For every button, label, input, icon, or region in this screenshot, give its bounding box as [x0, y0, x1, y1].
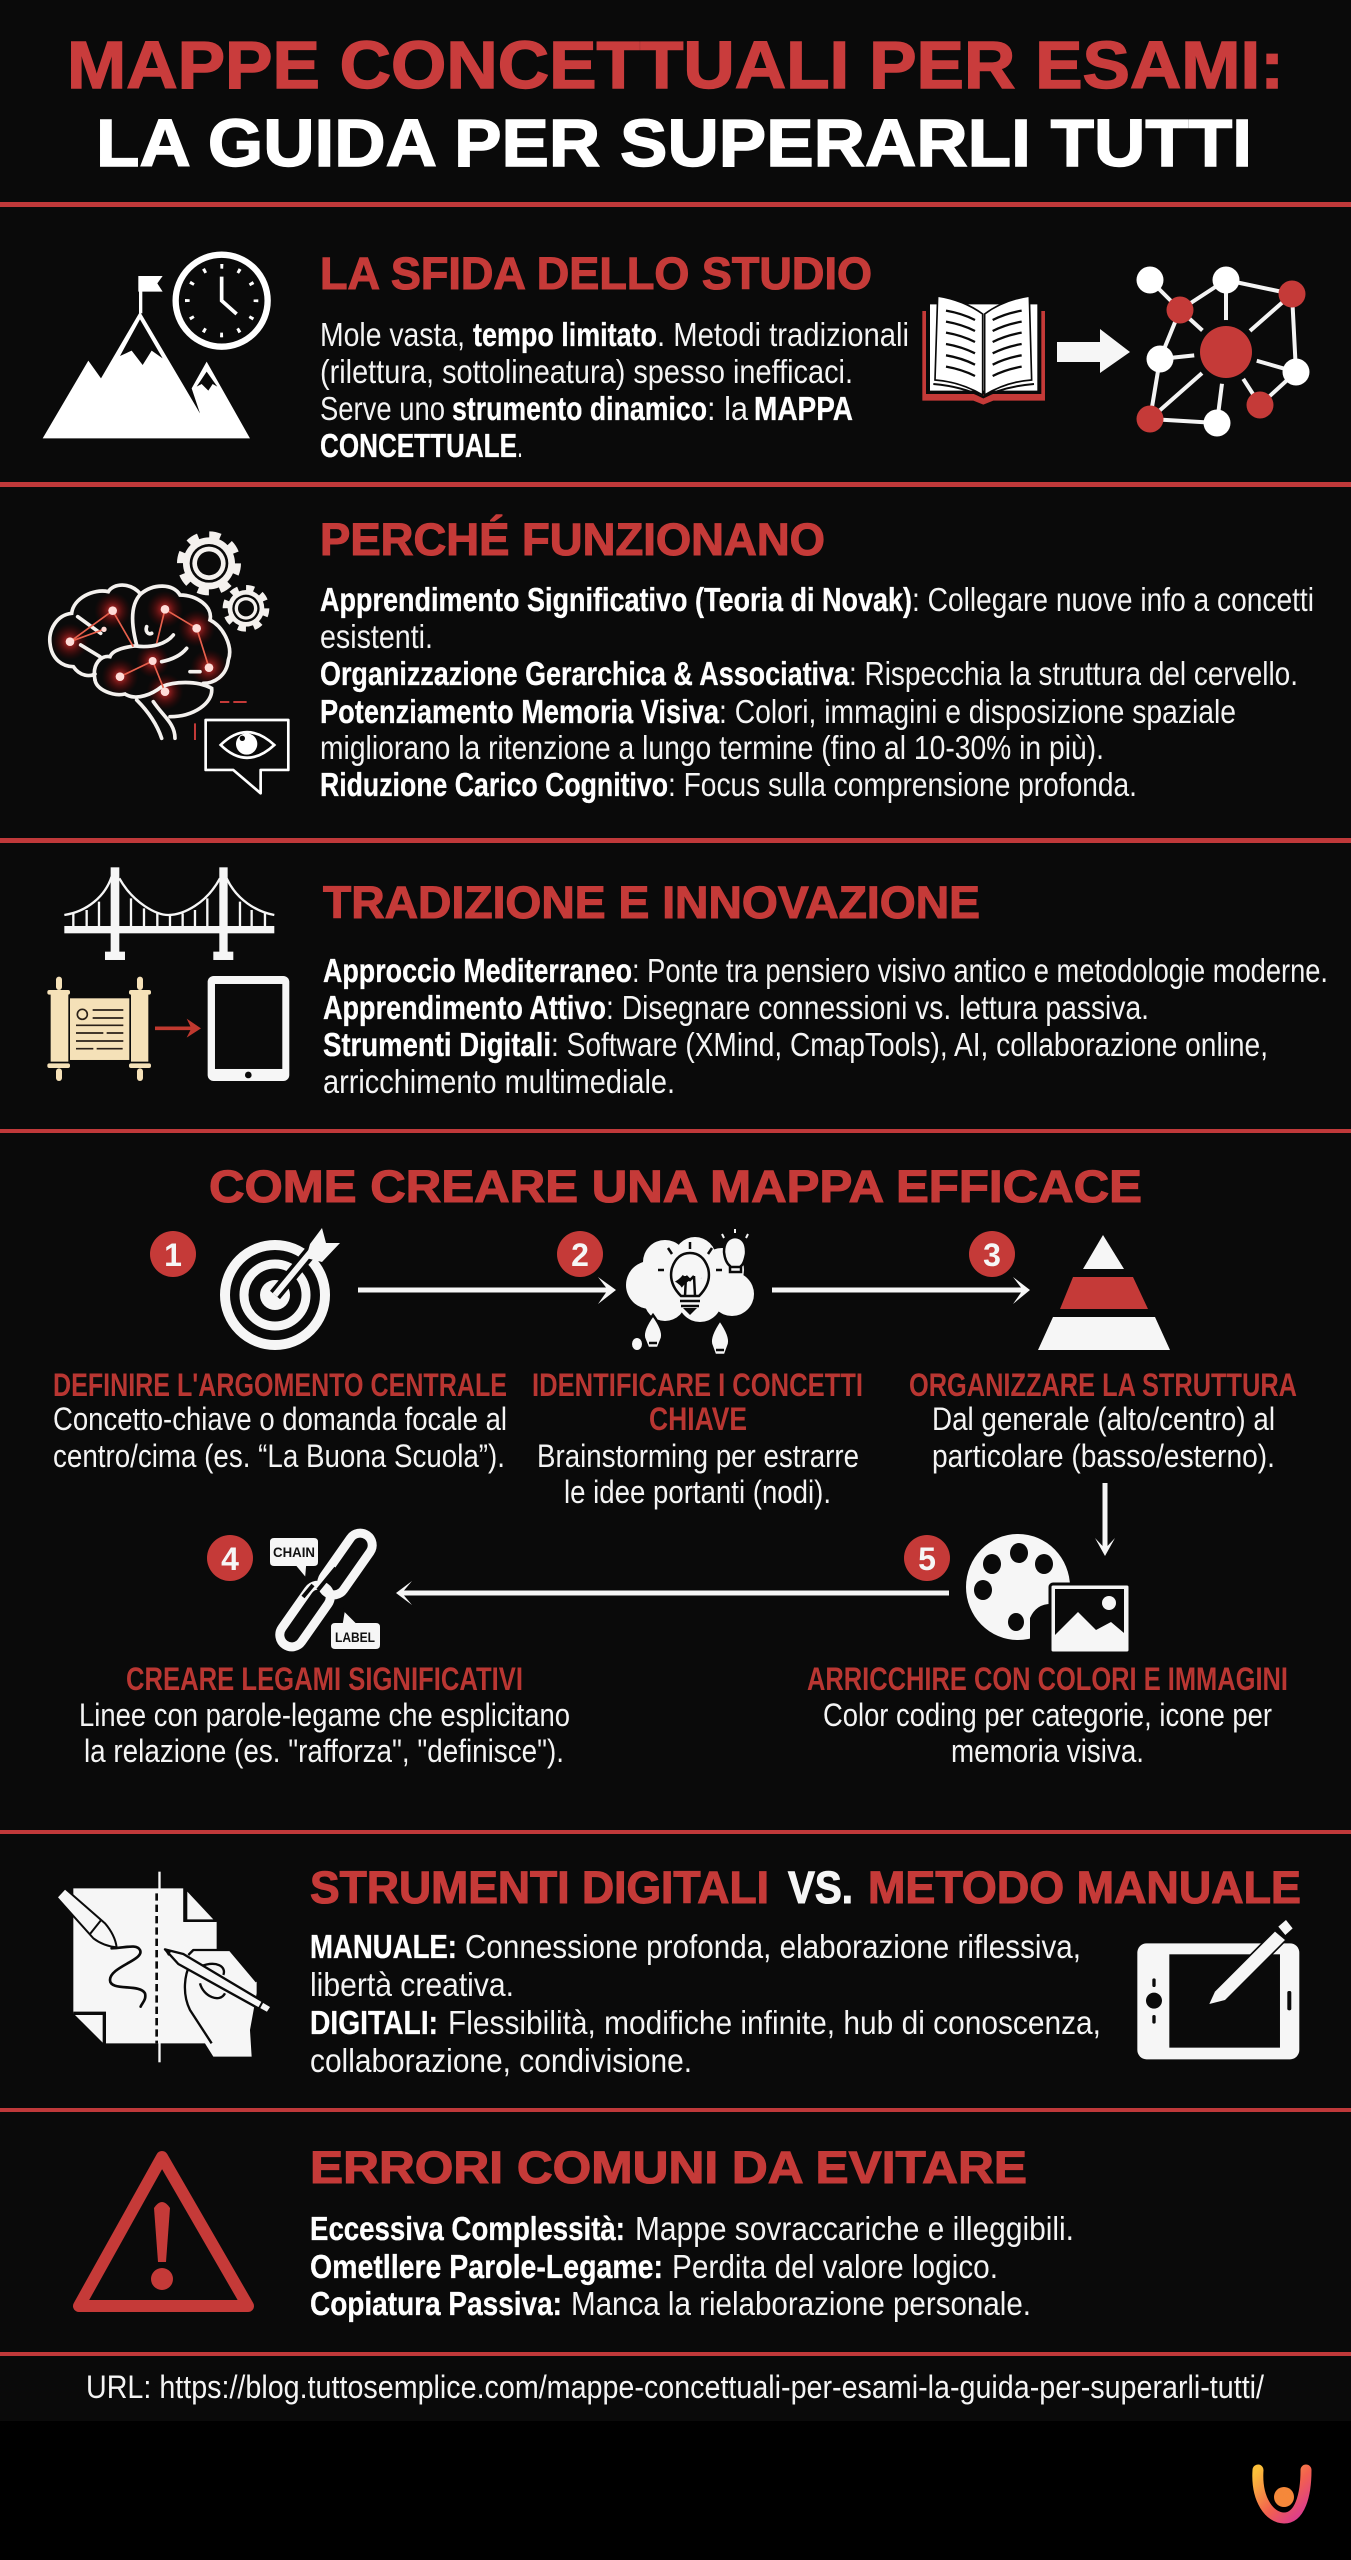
- icon: palette and image: [966, 1534, 1130, 1655]
- label: CHIAVE: [649, 1401, 747, 1437]
- text block: esistenti.: [320, 618, 433, 655]
- panel: errori comuni da evitare: [79, 2142, 1074, 2322]
- text block: Flessibilità, modifiche infinite, hub di conoscenza,: [448, 2004, 1101, 2041]
- text block: Mappe sovraccariche e illeggibili.: [635, 2210, 1074, 2247]
- badge 4: 4: [221, 1541, 239, 1577]
- icon: warning triangle: [79, 2157, 248, 2306]
- text block: [320, 316, 909, 464]
- arrow: [772, 1277, 1030, 1304]
- description: [932, 1401, 1275, 1474]
- description: [53, 1401, 507, 1474]
- badge 5: 5: [918, 1541, 936, 1577]
- text block: Apprendimento Attivo: [323, 989, 606, 1026]
- text block: .: [517, 427, 523, 464]
- badge 3: 3: [983, 1237, 1001, 1273]
- text block: Strumenti Digitali: [323, 1026, 551, 1063]
- panel: tradizione e innovazione: [47, 867, 1328, 1100]
- text block: arricchimento multimediale.: [323, 1063, 675, 1100]
- label: IDENTIFICARE I CONCETTI: [532, 1367, 863, 1403]
- icon: hand drawing on paper: [57, 1872, 272, 2062]
- description: Concetto-chiave o domanda focale al: [53, 1401, 507, 1437]
- text block: Riduzione Carico Cognitivo: [320, 766, 668, 803]
- text block: Organizzazione Gerarchica & Associativa: [320, 655, 850, 692]
- step 5: [807, 1534, 1288, 1769]
- heading: STRUMENTI DIGITALI: [310, 1862, 769, 1913]
- description: le idee portanti (nodi).: [564, 1474, 831, 1510]
- icon: mountain and clock: [43, 255, 268, 438]
- badge 5: [904, 1535, 950, 1581]
- arrow: [396, 1581, 949, 1605]
- label: DEFINIRE L'ARGOMENTO CENTRALE: [53, 1367, 507, 1403]
- panel: strumenti digitali vs metodo manuale: [57, 1862, 1301, 2079]
- text block: tempo limitato: [473, 316, 657, 353]
- text block: [310, 1928, 1101, 2079]
- description: particolare (basso/esterno).: [932, 1438, 1275, 1474]
- heading: VS.: [788, 1862, 853, 1913]
- text block: (rilettura, sottolineatura) spesso inefficaci.: [320, 353, 853, 390]
- icon: tablet and stylus: [1137, 1920, 1299, 2059]
- badge 4: [207, 1535, 253, 1581]
- text block: [323, 952, 1328, 1100]
- description: la relazione (es. "rafforza", "definisce").: [84, 1733, 564, 1769]
- text block: [310, 2210, 1074, 2322]
- icon: chain with labels: [269, 1528, 381, 1652]
- arrow: [1057, 329, 1130, 373]
- badge 2: [557, 1231, 603, 1277]
- heading: PERCHÉ FUNZIONANO: [320, 514, 825, 565]
- icon: chain with labels: LABEL: [335, 1629, 375, 1645]
- text block: libertà creativa.: [310, 1966, 514, 2003]
- text block: : la: [707, 390, 749, 427]
- title: [67, 28, 1284, 181]
- badge 2: 2: [571, 1237, 589, 1273]
- icon: bridge: [64, 867, 274, 960]
- text block: Ometllere Parole-Legame:: [310, 2248, 663, 2285]
- heading: LA SFIDA DELLO STUDIO: [320, 248, 872, 299]
- text block: CONCETTUALE: [320, 427, 517, 464]
- description: centro/cima (es. “La Buona Scuola”).: [53, 1438, 505, 1474]
- text block: Copiatura Passiva:: [310, 2285, 562, 2322]
- label: CREARE LEGAMI SIGNIFICATIVI: [126, 1661, 523, 1697]
- step 3: [909, 1231, 1297, 1474]
- icon: chain with labels: CHAIN: [273, 1544, 315, 1560]
- text block: strumento dinamico: [452, 390, 707, 427]
- text block: Apprendimento Significativo (Teoria di Novak): [320, 581, 912, 618]
- arrow: [358, 1277, 616, 1304]
- description: memoria visiva.: [951, 1733, 1144, 1769]
- text block: Eccessiva Complessità:: [310, 2210, 625, 2247]
- text block: Approccio Mediterraneo: [323, 952, 632, 989]
- heading: TRADIZIONE E INNOVAZIONE: [323, 877, 980, 928]
- text block: : Focus sulla comprensione profonda.: [668, 766, 1137, 803]
- text block: Potenziamento Memoria Visiva: [320, 693, 720, 730]
- icon: cloud with bulbs: [626, 1229, 754, 1355]
- heading: ERRORI COMUNI DA EVITARE: [310, 2142, 1027, 2193]
- text block: [320, 581, 1314, 803]
- text block: Perdita del valore logico.: [672, 2248, 998, 2285]
- panel: perché funzionano: [50, 514, 1314, 803]
- text block: Connessione profonda, elaborazione riflessiva,: [465, 1928, 1081, 1965]
- text block: : Disegnare connessioni vs. lettura passiva.: [606, 989, 1149, 1026]
- description: Brainstorming per estrarre: [537, 1438, 859, 1474]
- step 4: [79, 1528, 570, 1769]
- description: Dal generale (alto/centro) al: [932, 1401, 1275, 1437]
- description: Color coding per categorie, icone per: [823, 1697, 1272, 1733]
- label: [532, 1367, 863, 1437]
- title: MAPPE CONCETTUALI PER ESAMI:: [67, 28, 1284, 103]
- text block: DIGITALI:: [310, 2004, 438, 2041]
- text block: Mole vasta,: [320, 316, 465, 353]
- badge 1: 1: [164, 1237, 182, 1273]
- text block: MANUALE:: [310, 1928, 457, 1965]
- icon: scroll to tablet: [47, 976, 289, 1081]
- text block: Manca la rielaborazione personale.: [571, 2285, 1031, 2322]
- text block: . Metodi tradizionali: [657, 316, 909, 353]
- icon: concept network: [1136, 266, 1310, 436]
- panel: come creare una mappa efficace: [53, 1161, 1297, 1769]
- text block: : Colori, immagini e disposizione spaziale: [719, 693, 1236, 730]
- step 2: [532, 1229, 863, 1510]
- step 1: [53, 1228, 507, 1474]
- text block: Serve uno: [320, 390, 445, 427]
- text block: MAPPA: [754, 390, 853, 427]
- title: LA GUIDA PER SUPERARLI TUTTI: [96, 106, 1252, 181]
- icon: pyramid: [1038, 1235, 1170, 1350]
- description: [537, 1438, 859, 1510]
- description: Linee con parole-legame che esplicitano: [79, 1697, 570, 1733]
- text block: collaborazione, condivisione.: [310, 2042, 692, 2079]
- icon: logo: [1258, 2470, 1306, 2518]
- description: [823, 1697, 1272, 1769]
- text block: migliorano la ritenzione a lungo termine (fino al 10-30% in più).: [320, 729, 1104, 766]
- panel: la sfida dello studio: [43, 248, 1309, 464]
- badge 3: [969, 1231, 1015, 1277]
- badge 1: [150, 1231, 196, 1277]
- description: [79, 1697, 570, 1769]
- heading: [310, 1862, 1301, 1913]
- heading: COME CREARE UNA MAPPA EFFICACE: [209, 1161, 1142, 1212]
- icon: target: [225, 1228, 340, 1345]
- icon: brain, gears and eye: [50, 535, 288, 793]
- icon: open book: [922, 296, 1045, 405]
- heading: METODO MANUALE: [868, 1862, 1301, 1913]
- arrow: [1095, 1483, 1115, 1556]
